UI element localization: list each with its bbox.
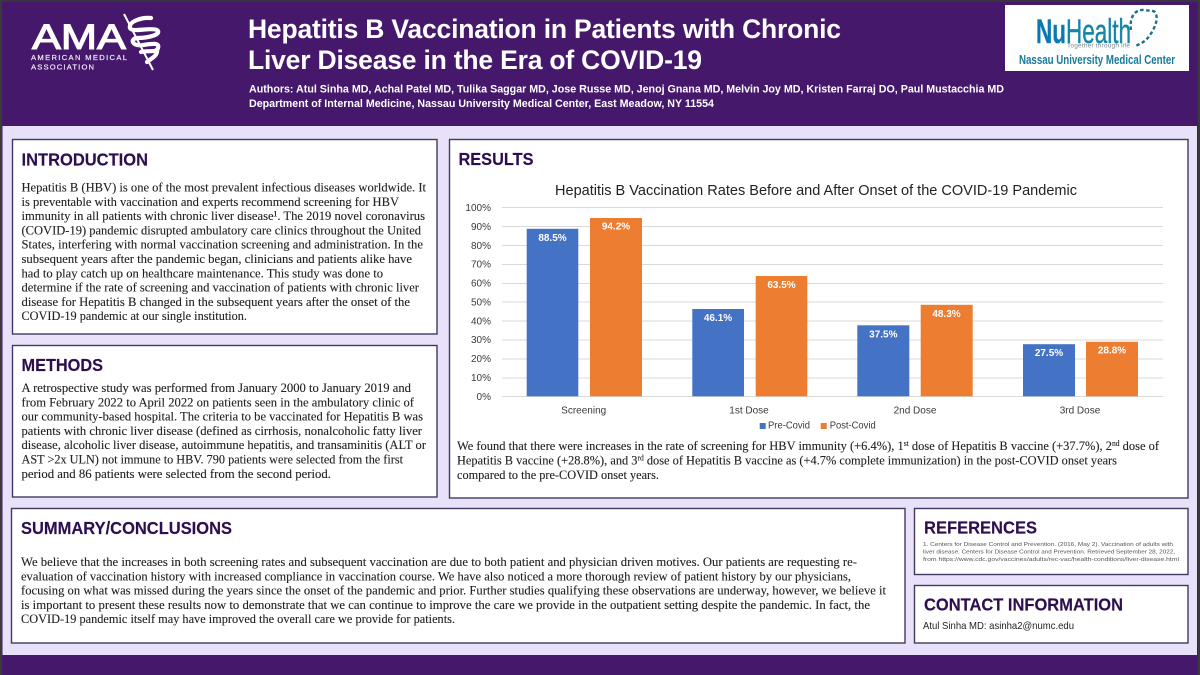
bars: 1st dose <box>692 276 807 396</box>
text block: conclusions body <box>21 554 886 626</box>
text block: introduction body: COVID-19 pandemic at our single institution. <box>22 308 247 323</box>
bars: 2nd dose: 48.3% <box>932 309 961 320</box>
category labels <box>561 406 1101 416</box>
text block: introduction body: is preventable with vaccination and experts recommend screening for HBV <box>22 194 400 209</box>
text block: introduction body: subsequent years after the pandemic began, clinicians and patients alike have <box>22 251 412 266</box>
AMA logo: AMERICAN MEDICAL <box>31 53 127 62</box>
y axis labels: 70% <box>471 260 491 270</box>
text block: conclusions body: evaluation of vaccination history with increased compliance in vaccination course. We have also noticed a more thorough review of patient history by our physicians, <box>21 568 851 583</box>
text block: results summary <box>457 438 1160 482</box>
bar chart: vaccination rates <box>465 183 1163 432</box>
y axis labels: 60% <box>471 278 491 290</box>
y axis labels: 20% <box>471 354 491 365</box>
panel: references <box>914 508 1188 574</box>
category labels: 3rd Dose <box>1060 406 1101 416</box>
bars: 3rd dose <box>1023 342 1138 396</box>
text block: introduction body: determine if the rate of screening and vaccination of patients with chronic liver <box>22 280 420 295</box>
text block: introduction body: (COVID-19) pandemic disrupted ambulatory care clinics throughout the United <box>22 222 421 237</box>
category labels: 1st Dose <box>729 406 769 416</box>
title: Hepatitis B Vaccination in Patients with Chronic <box>248 14 841 44</box>
y axis labels: 30% <box>471 335 491 346</box>
text block: methods body: period and 86 patients were selected from the second period. <box>22 466 331 481</box>
heading: methods: METHODS <box>22 355 103 375</box>
y axis labels: 90% <box>471 222 491 233</box>
bars: 3rd dose: 28.8% <box>1098 346 1126 356</box>
authors and affiliation: Authors: Atul Sinha MD, Achal Patel MD, Tulika Saggar MD, Jose Russe MD, Jenoj Gnana MD, Melvin Joy MD, Kristen Farraj DO, Paul Mustacchia MD <box>249 84 1004 96</box>
category labels: 2nd Dose <box>894 406 937 416</box>
panel: methods <box>12 346 437 497</box>
text block: results summary: Hepatitis B vaccine (+28.8%), and 3rd dose of Hepatitis B vaccine as (+4.7% complete immunization) in the post-COVID onset years <box>457 453 1117 468</box>
y axis labels: 100% <box>465 203 491 214</box>
text block: citation: liver disease. Centers for Disease Control and Prevention. Retrieved September 28, 2022, <box>923 550 1175 556</box>
header band <box>31 5 1189 110</box>
text block: methods body: from February 2022 to April 2022 on patients seen in the ambulatory clinic of <box>22 394 415 409</box>
legend: Post-Covid <box>830 421 876 432</box>
text block: conclusions body: We believe that the increases in both screening rates and subsequent vaccination are due to both patient and physician driven motives. Our patients are requesting re- <box>21 554 857 569</box>
legend: Pre-Covid <box>768 421 810 432</box>
y axis labels: 10% <box>471 373 491 384</box>
y axis labels: 80% <box>471 241 491 252</box>
y axis labels: 40% <box>471 316 491 328</box>
authors and affiliation <box>249 84 1004 110</box>
NuHealth logo: NuHealth <box>1036 13 1131 51</box>
text block: introduction body: disease for Hepatitis B changed in the subsequent years after the onset of the <box>22 294 410 309</box>
NuHealth logo <box>1005 5 1189 71</box>
chart title: Hepatitis B Vaccination Rates Before and After Onset of the COVID-19 Pandemic <box>555 183 1077 199</box>
heading: summary and conclusions: SUMMARY/CONCLUSIONS <box>21 518 232 538</box>
panel: results <box>450 140 1188 498</box>
text block: introduction body: had to play catch up on healthcare maintenance. This study was done to <box>22 265 383 280</box>
AMA logo: ASSOCIATION <box>31 63 94 72</box>
text block: citation: 1. Centers for Disease Control and Prevention. (2016, May 2). Vaccination of adults with <box>923 542 1173 548</box>
text block: methods body <box>22 380 427 481</box>
legend <box>760 421 876 432</box>
text block: methods body: patients with chronic liver disease (defined as cirrhosis, nonalcoholic fatty liver <box>22 423 423 438</box>
title: Liver Disease in the Era of COVID-19 <box>248 45 702 75</box>
text block: conclusions body: focusing on what was missed during the years since the onset of the pandemic and prior. Further studies qualifying these observations are underway, however, we believe it <box>21 582 886 598</box>
text block: results summary: compared to the pre-COVID onset years. <box>457 467 659 482</box>
heading: introduction: INTRODUCTION <box>22 150 148 170</box>
heading: references: REFERENCES <box>924 517 1037 537</box>
text block: conclusions body: COVID-19 pandemic itself may have improved the overall care we provide for patients. <box>21 611 455 626</box>
text block: introduction body: immunity in all patients with chronic liver disease¹. The 2019 novel coronavirus <box>22 208 425 223</box>
text block: methods body: A retrospective study was performed from January 2000 to January 2019 and <box>22 380 411 395</box>
bars: 1st dose: 63.5% <box>767 280 796 291</box>
text block: conclusions body: is important to present these results now to demonstrate that we can continue to improve the care we provide in the outpatient setting despite the pandemic. In fact, the <box>21 597 870 612</box>
AMA logo <box>31 14 158 72</box>
AMA logo: AMA <box>32 18 127 57</box>
text block: results summary: We found that there were increases in the rate of screening for HBV immunity (+6.4%), 1st dose of Hepatitis B vaccine (+37.7%), 2nd dose of <box>457 438 1160 453</box>
y axis labels <box>465 203 491 403</box>
bars: 1st dose: 46.1% <box>704 313 732 324</box>
authors and affiliation: Department of Internal Medicine, Nassau University Medical Center, East Meadow, NY 11554 <box>249 98 714 110</box>
title <box>248 14 841 75</box>
text block: methods body: AST >2x ULN) not immune to HBV. 790 patients were selected from the first <box>22 452 403 466</box>
y axis labels: 50% <box>471 298 491 308</box>
text block: methods body: disease, alcoholic liver disease, autoimmune hepatitis, and transaminitis (ALT or <box>22 437 427 452</box>
bars: 2nd dose: 37.5% <box>869 330 898 340</box>
text block: citation: from https://www.cdc.gov/vaccines/adults/rec-vac/health-conditions/liver-disease.html <box>923 557 1179 563</box>
panel: introduction <box>12 140 437 334</box>
NuHealth logo: Together through life <box>1067 43 1130 50</box>
text block: introduction body: Hepatitis B (HBV) is one of the most prevalent infectious diseases worldwide. It <box>22 180 426 194</box>
category labels: Screening <box>561 406 606 416</box>
bars: screening: 88.5% <box>538 233 567 244</box>
bars: 2nd dose <box>857 305 973 396</box>
heading: contact information: CONTACT INFORMATION <box>924 595 1123 615</box>
panel: contact information <box>914 586 1188 643</box>
bars: screening: 94.2% <box>602 222 630 232</box>
panel: summary and conclusions <box>12 508 905 643</box>
bars: 3rd dose: 27.5% <box>1035 348 1063 359</box>
text block: contact: Atul Sinha MD: asinha2@numc.edu <box>923 621 1074 632</box>
y axis labels: 0% <box>477 392 491 403</box>
text block: introduction body <box>22 180 426 323</box>
text block: citation <box>923 542 1179 563</box>
text block: introduction body: States, interfering with normal vaccination screening and administration. In the <box>22 237 423 252</box>
text block: methods body: our community-based hospital. The criteria to be vaccinated for Hepatitis B was <box>22 409 423 424</box>
bars: screening <box>527 218 642 396</box>
heading: results: RESULTS <box>458 149 534 169</box>
